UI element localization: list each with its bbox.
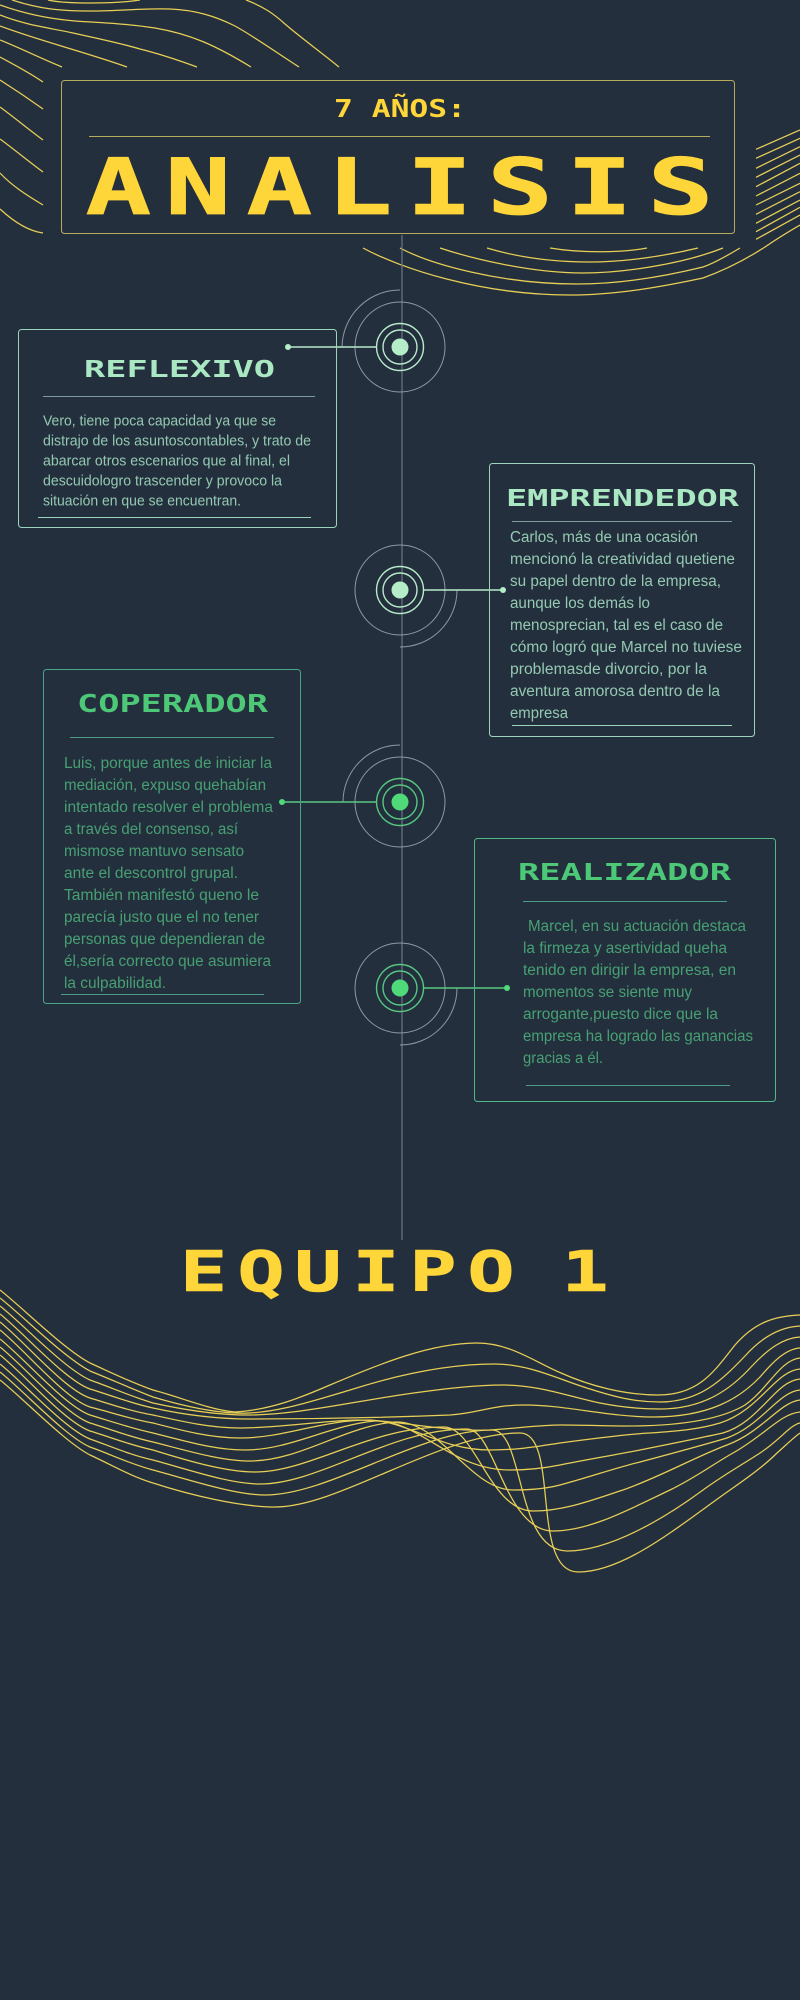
subtitle: 7 AÑOS: xyxy=(334,94,466,123)
text block: realizador: arrogante,puesto dice que la xyxy=(523,1006,718,1023)
text block: emprendedor: problemasde divorcio, por la xyxy=(510,661,707,678)
text block: realizador: momentos se siente muy xyxy=(523,984,692,1001)
text block: realizador: la firmeza y asertividad queha xyxy=(523,940,727,957)
text block: emprendedor xyxy=(510,529,742,722)
text block: emprendedor: Carlos, más de una ocasión xyxy=(510,529,698,546)
text block: reflexivo: situación en que se encuentran. xyxy=(43,493,241,509)
text block: coperador: Luis, porque antes de iniciar la xyxy=(64,755,272,772)
node 3 xyxy=(279,745,445,847)
panel: emprendedor xyxy=(490,464,754,736)
text block: reflexivo: distrajo de los asuntoscontables, y trato de xyxy=(43,433,311,449)
text block: coperador: a través del consenso, así xyxy=(64,821,239,838)
text block: emprendedor: menosprecian, tal es el caso de xyxy=(510,617,723,634)
text block: reflexivo xyxy=(43,413,311,509)
wave lines: top right xyxy=(363,130,800,295)
text block: emprendedor: empresa xyxy=(510,705,568,722)
panel: coperador xyxy=(44,670,300,1004)
title panel xyxy=(62,80,734,234)
heading: reflexivo: REFLEXIVO xyxy=(84,355,275,383)
text block: coperador: mismose mantuvo sensato xyxy=(64,843,244,860)
text block: reflexivo: Vero, tiene poca capacidad ya que se xyxy=(43,413,276,429)
text block: realizador xyxy=(523,918,753,1067)
text block: reflexivo: abarcar otros escenarios que al final, el xyxy=(43,453,290,469)
text block: emprendedor: aunque los demás lo xyxy=(510,595,650,612)
text block: coperador: intentado resolver el problema xyxy=(64,799,273,816)
text block: realizador: empresa ha logrado las ganancias xyxy=(523,1028,753,1045)
panel: realizador xyxy=(474,838,776,1102)
wave lines: bottom xyxy=(0,1290,800,1572)
text block: reflexivo: descuidologro trascender y provoco la xyxy=(43,473,283,489)
text block: emprendedor: mencionó la creatividad quetiene xyxy=(510,551,735,568)
node 1 xyxy=(285,290,445,392)
wave lines: top left xyxy=(0,0,339,233)
text block: realizador: tenido en dirigir la empresa, en xyxy=(523,962,736,979)
main title: ANALISIS xyxy=(86,142,713,233)
text block: coperador: parecía justo que el no tener xyxy=(64,909,259,926)
heading: emprendedor: EMPRENDEDOR xyxy=(506,484,740,512)
text block: coperador: ante el descontrol grupal. xyxy=(64,865,238,882)
text block: emprendedor: cómo logró que Marcel no tuviese xyxy=(510,639,742,656)
node 4 xyxy=(355,943,510,1045)
text block: emprendedor: su papel dentro de la empresa, xyxy=(510,573,721,590)
heading: coperador: COPERADOR xyxy=(77,689,268,718)
text block: coperador: él,sería correcto que asumiera xyxy=(64,953,271,970)
text block: realizador: gracias a él. xyxy=(523,1050,603,1067)
node 2 xyxy=(355,545,506,647)
vertical timeline xyxy=(401,235,403,1240)
text block: emprendedor: aventura amorosa dentro de la xyxy=(510,683,720,700)
text block: coperador: También manifestó queno le xyxy=(64,887,259,904)
heading: realizador: REALIZADOR xyxy=(518,858,732,886)
text block: coperador: la culpabilidad. xyxy=(64,975,166,992)
text block: realizador: Marcel, en su actuación destaca xyxy=(528,918,746,935)
panel: reflexivo xyxy=(18,330,336,528)
text block: coperador: personas que dependieran de xyxy=(64,931,265,948)
footer title: EQUIPO 1 xyxy=(180,1240,609,1305)
text block: coperador xyxy=(64,755,273,992)
text block: coperador: mediación, expuso quehabían xyxy=(64,777,266,794)
